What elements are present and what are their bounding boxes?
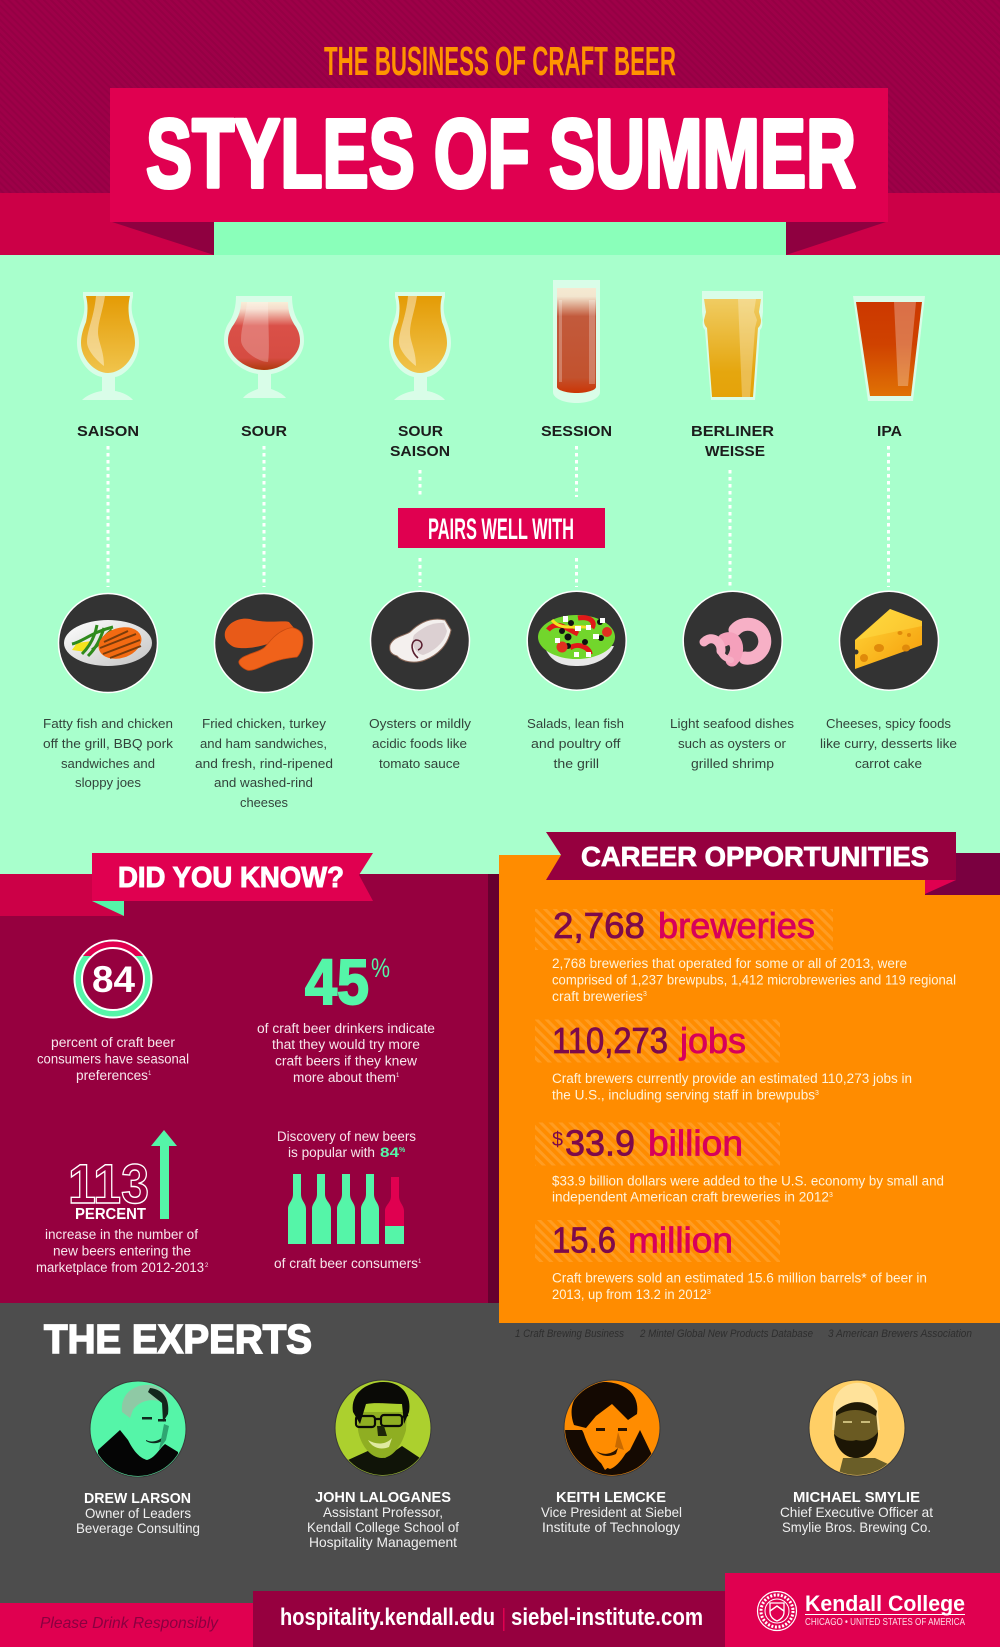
text: 113 percent: marketplace from 2012-2013 — [36, 1260, 204, 1275]
expert name: Michael Smylie: Smylie Bros. Brewing Co. — [782, 1519, 931, 1535]
beer style names: BERLINER — [691, 423, 774, 440]
expert name: Keith Lemcke — [541, 1489, 682, 1535]
text: 84 percent: 1 — [148, 1071, 152, 1077]
text: discovery: is popular with — [288, 1145, 375, 1160]
did you know ribbon — [92, 853, 373, 901]
glass: saison — [77, 292, 139, 400]
expert name: John Laloganes: Assistant Professor, — [323, 1504, 443, 1520]
text: discovery: 84 — [380, 1144, 399, 1160]
food pairing text: the grill — [554, 756, 599, 771]
food pairing text: Fatty fish and chicken — [43, 716, 173, 731]
glass: sour — [224, 296, 304, 398]
text: of consumers: of craft beer consumers — [274, 1256, 418, 1271]
text: 45 percent: that they would try more — [272, 1037, 420, 1052]
food pairing text — [43, 716, 957, 810]
footer: kendall college logo — [725, 1573, 1000, 1647]
text: million: 2013, up from 13.2 in 2012 — [552, 1287, 707, 1302]
food icon: fried chicken — [214, 594, 314, 692]
expert name: John Laloganes — [307, 1489, 459, 1550]
text: of consumers: 1 — [418, 1259, 422, 1265]
food pairing text: carrot cake — [855, 756, 922, 771]
food pairing text: tomato sauce — [379, 756, 460, 771]
text: 84 percent — [37, 1035, 189, 1083]
stat: million — [535, 1220, 780, 1262]
text: 113 percent — [36, 1227, 209, 1275]
food pairing text: cheeses — [240, 795, 288, 810]
expert name: Keith Lemcke: Vice President at Siebel — [541, 1504, 682, 1520]
text: jobs — [552, 1071, 912, 1103]
expert name: Michael Smylie — [780, 1489, 933, 1535]
food pairing text: and poultry off — [531, 736, 621, 751]
stat: jobs — [535, 1020, 780, 1062]
bottle chart — [288, 1174, 404, 1244]
stat: breweries: 2,768 — [553, 905, 645, 946]
food pairing text: acidic foods like — [372, 736, 467, 751]
footer: websites: siebel-institute.com — [511, 1604, 703, 1631]
text: jobs: Craft brewers currently provide an estimated 110,273 jobs in — [552, 1071, 912, 1086]
text: billion — [552, 1174, 944, 1205]
stat: billion: $ — [552, 1129, 563, 1151]
beer style names: SOUR — [398, 423, 443, 440]
footnotes: 1 Craft Brewing Business — [515, 1328, 624, 1340]
text: breweries: comprised of 1,237 brewpubs, 1,412 microbreweries and 119 regional — [552, 973, 956, 988]
expert portrait: John Laloganes — [335, 1380, 431, 1480]
text: billion: 3 — [829, 1192, 833, 1199]
expert name: John Laloganes: JOHN LALOGANES — [315, 1489, 451, 1506]
text: discovery: Discovery of new beers — [277, 1129, 416, 1144]
food pairing text: and washed-rind — [214, 775, 313, 790]
text: 45 percent: more about them — [293, 1070, 396, 1085]
subtitle: THE BUSINESS OF CRAFT BEER — [324, 38, 676, 84]
expert name: Michael Smylie: MICHAEL SMYLIE — [793, 1489, 920, 1506]
panel: mint background — [0, 255, 1000, 895]
food pairing text: sloppy joes — [75, 775, 141, 790]
footer: please drink responsibly — [0, 1603, 253, 1647]
expert name: Drew Larson — [76, 1490, 200, 1536]
expert name: Drew Larson: Beverage Consulting — [76, 1520, 200, 1536]
footer: please drink responsibly: Please Drink Responsibly — [40, 1615, 219, 1632]
food pairing text: Fried chicken, turkey — [202, 716, 327, 731]
food icon: cheese — [840, 591, 938, 690]
expert name: Drew Larson: Owner of Leaders — [85, 1505, 191, 1521]
stat: jobs: 110,273 — [552, 1020, 668, 1061]
pairs well with label: PAIRS WELL WITH — [428, 513, 574, 546]
stat: 84 percent ring — [74, 940, 152, 1018]
panel: career opportunities — [499, 832, 1000, 1323]
footer: websites: hospitality.kendall.edu — [280, 1604, 495, 1631]
food pairing text: and fresh, rind-ripened — [195, 756, 333, 771]
text: discovery: % — [399, 1147, 406, 1154]
panel: did you know — [0, 853, 499, 1303]
glass: berliner weisse — [702, 291, 763, 400]
stat: 84 percent ring: 84 — [92, 959, 135, 1000]
text: 45 percent — [257, 1021, 435, 1085]
footnotes: 2 Mintel Global New Products Database — [639, 1328, 813, 1340]
footer: kendall college logo: Kendall College — [805, 1591, 965, 1616]
beer style names: WEISSE — [705, 443, 765, 460]
food pairing text: Oysters or mildly — [369, 716, 472, 731]
expert portrait: Michael Smylie — [809, 1380, 905, 1480]
panel: header — [0, 0, 1000, 255]
food icon: fish plate — [58, 594, 158, 692]
stat: 45 percent: % — [371, 953, 390, 983]
text: 113 percent: 2 — [205, 1263, 209, 1269]
expert portrait: Drew Larson — [90, 1381, 186, 1480]
did you know ribbon: DID YOU KNOW? — [118, 862, 344, 894]
food pairing text: off the grill, BBQ pork — [43, 736, 174, 751]
food icon: shrimp — [683, 591, 782, 690]
food pairing text: like curry, desserts like — [820, 736, 957, 751]
stat: 45 percent: 45 — [305, 946, 369, 1018]
stat: billion: billion — [648, 1123, 743, 1164]
panel: experts background — [0, 1303, 1000, 1647]
expert portrait: Keith Lemcke — [563, 1380, 660, 1480]
stat: million: million — [628, 1220, 733, 1261]
footer: kendall college logo: CHICAGO • UNITED STATES OF AMERICA — [805, 1617, 965, 1628]
text: 45 percent: 1 — [396, 1073, 400, 1079]
text: 45 percent: craft beers if they knew — [275, 1054, 417, 1068]
glass: ipa — [853, 296, 925, 401]
food pairing text: grilled shrimp — [691, 756, 774, 771]
heading: the experts: THE EXPERTS — [44, 1316, 312, 1362]
career ribbon — [546, 832, 956, 880]
beer style names: SESSION — [541, 423, 612, 440]
text: million — [552, 1270, 927, 1302]
food pairing text: such as oysters or — [678, 736, 787, 751]
stat: breweries — [535, 905, 833, 950]
text: jobs: the U.S., including serving staff in brewpubs — [552, 1088, 815, 1103]
career ribbon: CAREER OPPORTUNITIES — [581, 841, 929, 872]
food icon: salad — [527, 591, 626, 690]
text: 84 percent: preferences — [76, 1068, 148, 1083]
beer style names: SAISON — [77, 423, 139, 440]
text: 45 percent: of craft beer drinkers indicate — [257, 1021, 435, 1036]
text: million: Craft brewers sold an estimated 15.6 million barrels* of beer in — [552, 1270, 927, 1286]
text: breweries — [552, 956, 956, 1004]
stat: million: 15.6 — [552, 1220, 616, 1261]
food pairing text: Cheeses, spicy foods — [826, 716, 951, 731]
stat: breweries: breweries — [658, 905, 815, 946]
text: breweries: 2,768 breweries that operated for some or all of 2013, were — [552, 956, 907, 971]
food pairing text: Light seafood dishes — [670, 716, 795, 731]
food icon: oyster — [370, 591, 470, 690]
footer: websites — [253, 1591, 725, 1647]
food pairing text: Salads, lean fish — [527, 716, 624, 731]
stat: billion: 33.9 — [565, 1123, 635, 1164]
text: 113 percent: increase in the number of — [45, 1227, 198, 1242]
text: 113 percent: new beers entering the — [53, 1244, 191, 1258]
expert name: Michael Smylie: Chief Executive Officer at — [780, 1504, 933, 1520]
beer style names: IPA — [877, 423, 902, 440]
text: 84 percent: consumers have seasonal — [37, 1052, 189, 1066]
expert name: Drew Larson: DREW LARSON — [84, 1490, 191, 1507]
footnotes: 3 American Brewers Association — [828, 1328, 972, 1340]
icon: college seal — [758, 1592, 796, 1630]
text: 84 percent: percent of craft beer — [51, 1035, 176, 1050]
stat: 113 percent: PERCENT — [75, 1206, 146, 1223]
expert name: John Laloganes: Kendall College School of — [307, 1519, 459, 1535]
glass: sour saison — [389, 292, 451, 400]
beer style names: SOUR — [241, 423, 287, 440]
expert name: John Laloganes: Hospitality Management — [309, 1534, 457, 1550]
expert name: Keith Lemcke: Institute of Technology — [542, 1519, 680, 1535]
text: billion: $33.9 billion dollars were added to the U.S. economy by small and — [552, 1174, 944, 1188]
stat: 113 percent: 113 — [68, 1152, 149, 1215]
footnotes — [515, 1328, 972, 1340]
arrow up — [151, 1130, 177, 1219]
glass: session — [553, 280, 600, 403]
beer style names: SAISON — [390, 443, 450, 460]
beer style names — [77, 423, 902, 460]
stat: jobs: jobs — [679, 1020, 746, 1061]
text: breweries: craft breweries — [552, 989, 643, 1004]
text: breweries: 3 — [643, 991, 647, 998]
expert name: Keith Lemcke: KEITH LEMCKE — [556, 1489, 666, 1506]
text: million: 3 — [707, 1289, 711, 1296]
pairs well with label — [398, 508, 605, 548]
food pairing text: and ham sandwiches, — [200, 736, 327, 751]
stat: billion — [535, 1122, 780, 1166]
text: jobs: 3 — [815, 1090, 819, 1097]
text: discovery — [277, 1129, 416, 1160]
text: billion: independent American craft breweries in 2012 — [552, 1190, 829, 1205]
food pairing text: sandwiches and — [61, 756, 155, 771]
